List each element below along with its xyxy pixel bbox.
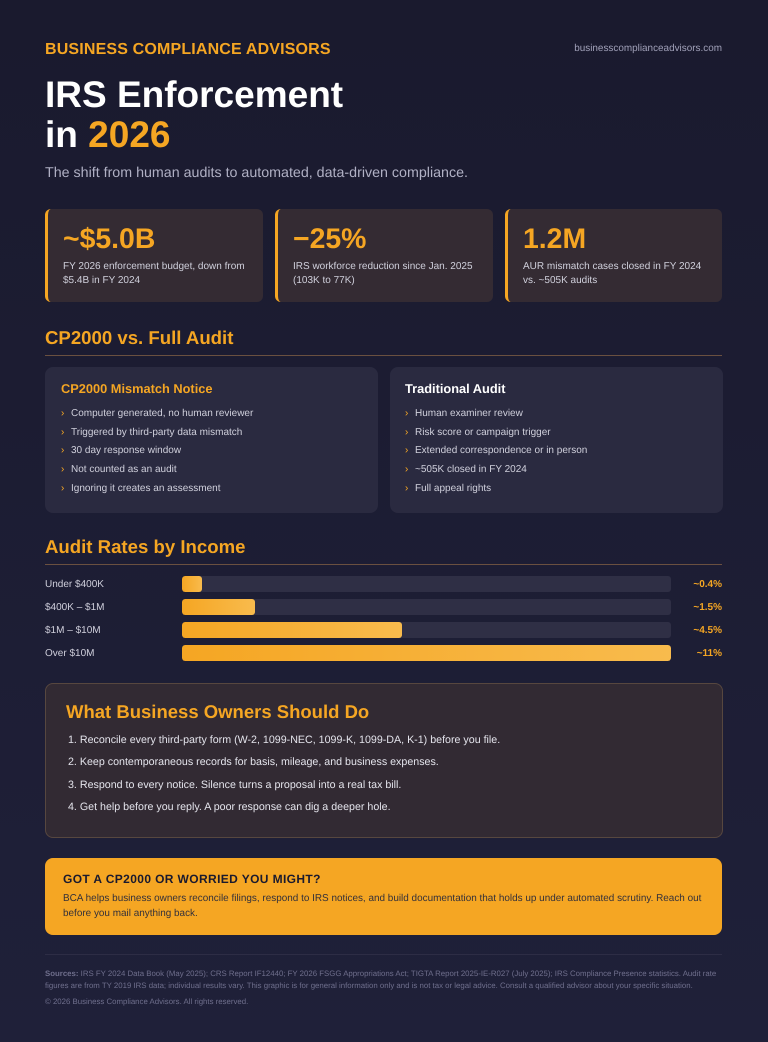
stat description [523, 260, 701, 286]
list: Full appeal rights [415, 483, 491, 494]
heading: Audit Rates by Income [45, 535, 722, 565]
value: ~1.5% [693, 602, 722, 613]
heading: Audit Rates by Income: Audit Rates by Income [45, 536, 245, 557]
subtitle: The shift from human audits to automated, data-driven compliance. [45, 165, 468, 181]
bar track [182, 576, 671, 592]
stat value: −25% [293, 223, 366, 255]
list: › [405, 408, 408, 419]
website: businesscomplianceadvisors.com [574, 43, 722, 54]
action list [68, 734, 500, 812]
row label: Under $400K [45, 579, 104, 590]
bar chart: audit rates [45, 576, 722, 661]
panel heading: Traditional Audit [405, 381, 505, 396]
callout [45, 858, 722, 935]
list: Risk score or campaign trigger [415, 427, 551, 438]
title: IRS Enforcement [45, 74, 343, 115]
list: Computer generated, no human reviewer [71, 408, 253, 419]
brand name: BUSINESS COMPLIANCE ADVISORS [45, 41, 331, 58]
row label: Over $10M [45, 648, 94, 659]
stat description: $5.4B in FY 2024 [63, 274, 140, 286]
bar track [182, 645, 671, 661]
list: 30 day response window [71, 445, 181, 456]
stat description: IRS workforce reduction since Jan. 2025 [293, 260, 473, 272]
list: › [61, 445, 64, 456]
row label: $400K – $1M [45, 602, 104, 613]
list: › [61, 483, 64, 494]
stat description [293, 260, 473, 286]
sources: figures are from TY 2019 IRS data; individual results vary. This graphic is for general information only and is not tax or legal advice. Consult a qualified advisor about your specific situation. [45, 981, 693, 990]
panel heading: What Business Owners Should Do [66, 701, 369, 722]
title [45, 74, 343, 155]
heading: CP2000 vs. Full Audit: CP2000 vs. Full Audit [45, 327, 233, 348]
heading: CP2000 vs. Full Audit [45, 326, 722, 356]
panel: what business owners should do [45, 683, 723, 838]
callout text [63, 892, 702, 918]
list: ~505K closed in FY 2024 [415, 464, 527, 475]
stat description: (103K to 77K) [293, 274, 355, 286]
value: ~0.4% [693, 579, 722, 590]
value: ~4.5% [693, 625, 722, 636]
stat description: AUR mismatch cases closed in FY 2024 [523, 260, 701, 272]
stat value: ~$5.0B [63, 223, 155, 255]
stat card: AUR cases [505, 209, 722, 302]
step 1: 1. Reconcile every third-party form (W-2, 1099-NEC, 1099-K, 1099-DA, K-1) before you file. [68, 734, 500, 746]
stat description: vs. ~505K audits [523, 274, 597, 286]
sources: Sources: IRS FY 2024 Data Book (May 2025); CRS Report IF12440; FY 2026 FSGG Appropriations Act; TIGTA Report 2025-IE-R027 (July 2025); IRS Compliance Presence statistics. Audit rate [45, 968, 716, 978]
panel: CP2000 mismatch notice [45, 367, 378, 513]
footer divider [45, 954, 722, 955]
callout text: BCA helps business owners reconcile filings, respond to IRS notices, and build documentation that holds up under automated scrutiny. Reach out [63, 892, 701, 904]
stat description: FY 2026 enforcement budget, down from [63, 260, 245, 272]
bar track [182, 622, 671, 638]
list: › [61, 427, 64, 438]
title: in 2026 [45, 114, 170, 155]
panel heading: CP2000 Mismatch Notice [61, 381, 212, 396]
callout text: before you mail anything back. [63, 908, 198, 918]
row label: $1M – $10M [45, 625, 101, 636]
stat description [63, 260, 245, 286]
list: Human examiner review [415, 408, 523, 419]
step 3: 3. Respond to every notice. Silence turns a proposal into a real tax bill. [68, 778, 401, 790]
list: Triggered by third-party data mismatch [71, 427, 242, 438]
list: › [61, 408, 64, 419]
callout heading: GOT A CP2000 OR WORRIED YOU MIGHT? [63, 872, 321, 886]
list [405, 408, 587, 494]
list: Extended correspondence or in person [415, 445, 587, 456]
list: › [61, 464, 64, 475]
stat value: 1.2M [523, 223, 586, 255]
list: › [405, 464, 408, 475]
step 4: 4. Get help before you reply. A poor response can dig a deeper hole. [68, 800, 391, 812]
step 2: 2. Keep contemporaneous records for basis, mileage, and business expenses. [68, 756, 439, 768]
list: › [405, 427, 408, 438]
stat card: workforce [275, 209, 492, 302]
list: Not counted as an audit [71, 464, 177, 475]
list [61, 408, 254, 494]
panel: traditional audit [390, 367, 722, 513]
bar track [182, 599, 671, 615]
list: Ignoring it creates an assessment [71, 483, 221, 494]
copyright: © 2026 Business Compliance Advisors. All rights reserved. [45, 996, 248, 1006]
value: ~11% [697, 648, 722, 659]
list: › [405, 483, 408, 494]
list: › [405, 445, 408, 456]
sources [45, 968, 716, 990]
stat card: budget [45, 209, 262, 302]
